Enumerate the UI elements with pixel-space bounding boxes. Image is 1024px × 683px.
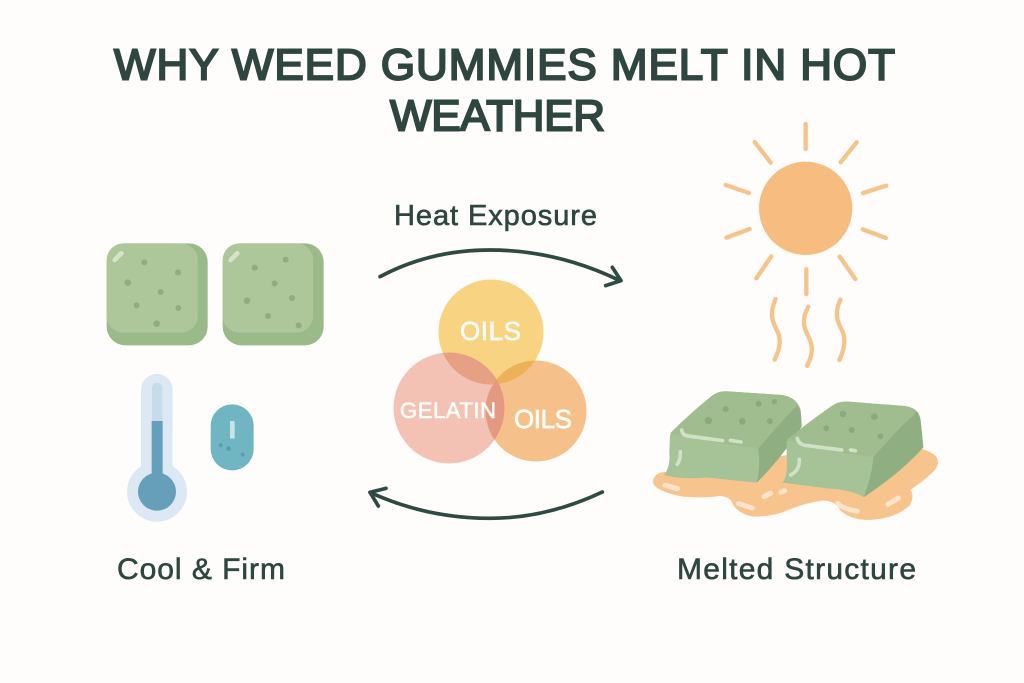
circle: gelatin xyxy=(394,352,504,464)
panel: ingredient venn diagram xyxy=(370,250,621,518)
icon: blue pill xyxy=(211,404,254,470)
melted puddle xyxy=(653,448,938,520)
icon: sun with heat waves xyxy=(726,124,886,366)
venn label: gelatin: GELATIN xyxy=(400,398,496,423)
arrow: heat exposure forward xyxy=(380,250,621,286)
venn label: oils right: OILS xyxy=(514,404,572,434)
arrow: cooling return xyxy=(370,488,602,518)
title: WEATHER xyxy=(390,92,605,140)
venn label: oils top: OILS xyxy=(460,316,521,346)
panel: cool and firm xyxy=(107,243,324,522)
melted gummy right xyxy=(783,402,923,497)
circle: oils right xyxy=(486,360,586,462)
title: WHY WEED GUMMIES MELT IN HOT xyxy=(114,40,895,90)
label: melted structure: Melted Structure xyxy=(677,553,916,586)
icon: melted gummies xyxy=(653,391,938,520)
label: heat exposure: Heat Exposure xyxy=(394,200,597,232)
melted gummy left xyxy=(664,391,802,483)
label: cool and firm: Cool & Firm xyxy=(117,553,285,586)
title xyxy=(114,40,895,140)
circle: oils top xyxy=(438,280,544,384)
icon: firm gummy right xyxy=(223,243,324,345)
icon: firm gummy left xyxy=(107,243,208,345)
icon: thermometer xyxy=(127,374,187,522)
